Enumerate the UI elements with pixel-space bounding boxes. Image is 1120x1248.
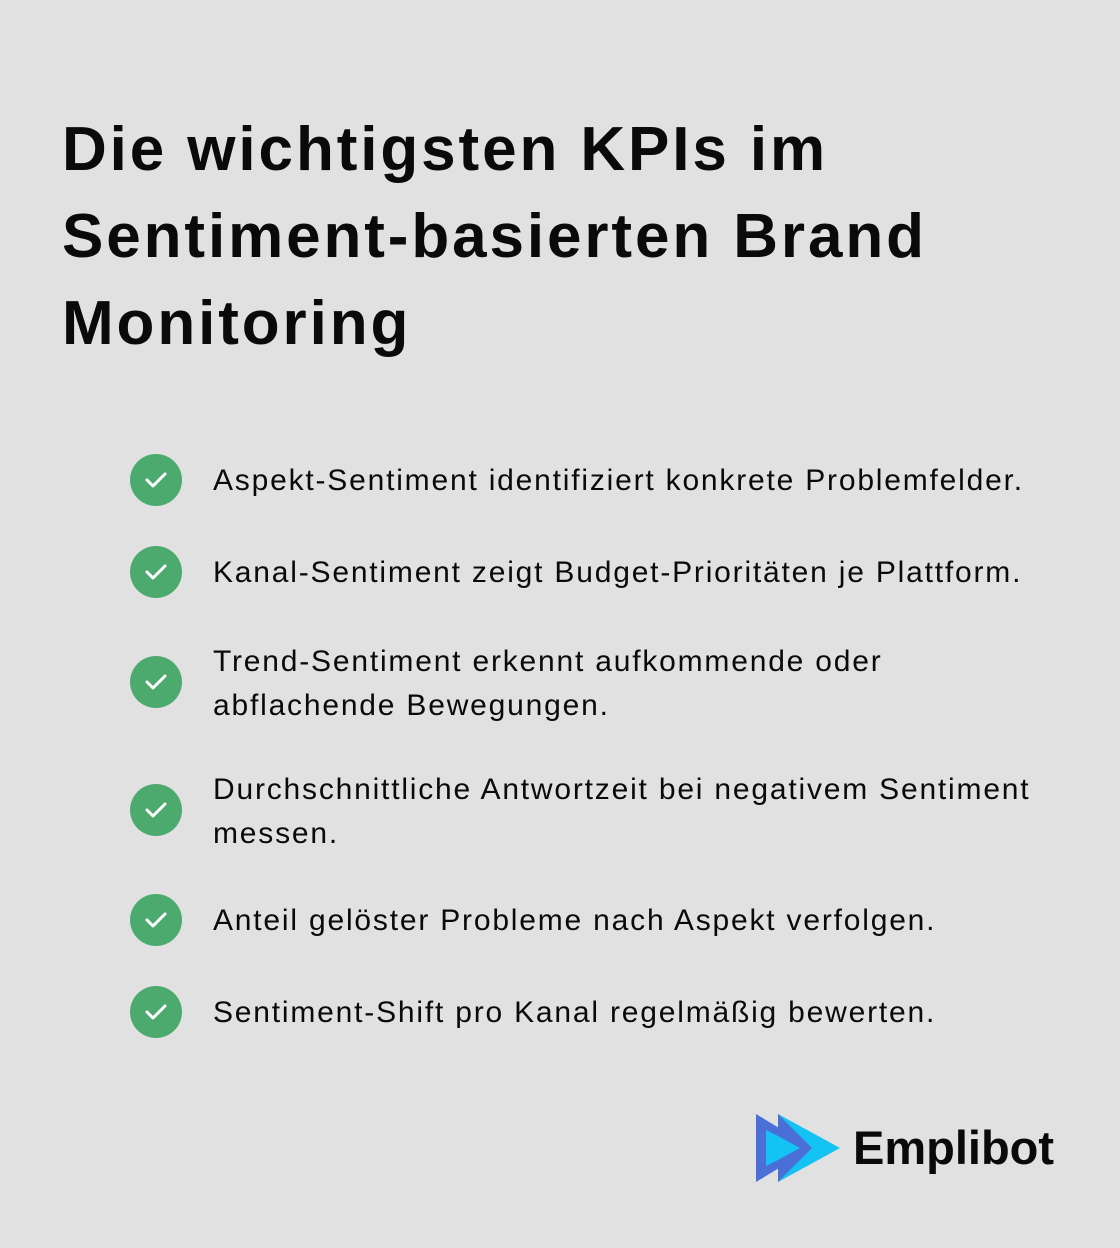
item 3: abflachende Bewegungen.	[213, 689, 610, 722]
item 4: Durchschnittliche Antwortzeit bei negativem Sentiment	[213, 773, 1030, 806]
item 5	[130, 894, 936, 946]
title: Monitoring	[62, 289, 411, 358]
title: Die wichtigsten KPIs im	[62, 115, 828, 184]
item 3	[130, 645, 883, 722]
item 3: Trend-Sentiment erkennt aufkommende oder	[213, 645, 883, 678]
icon: check	[130, 546, 182, 598]
logo text: Emplibot	[853, 1121, 1054, 1174]
icon: check	[130, 894, 182, 946]
icon: check	[130, 454, 182, 506]
icon: check	[130, 784, 182, 836]
title: Sentiment-basierten Brand	[62, 202, 927, 271]
item 1	[130, 454, 1024, 506]
icon: logo triangles	[756, 1114, 840, 1182]
item 4	[130, 773, 1030, 850]
title	[62, 115, 927, 358]
item 1: Aspekt-Sentiment identifiziert konkrete Problemfelder.	[213, 464, 1024, 497]
logo	[756, 1114, 1054, 1182]
icon: check	[130, 986, 182, 1038]
icon: check	[130, 656, 182, 708]
item 5: Anteil gelöster Probleme nach Aspekt verfolgen.	[213, 904, 936, 937]
item 6	[130, 986, 936, 1038]
item 6: Sentiment-Shift pro Kanal regelmäßig bewerten.	[213, 996, 936, 1029]
item 4: messen.	[213, 817, 339, 850]
item 2: Kanal-Sentiment zeigt Budget-Prioritäten je Plattform.	[213, 556, 1022, 589]
item 2	[130, 546, 1022, 598]
